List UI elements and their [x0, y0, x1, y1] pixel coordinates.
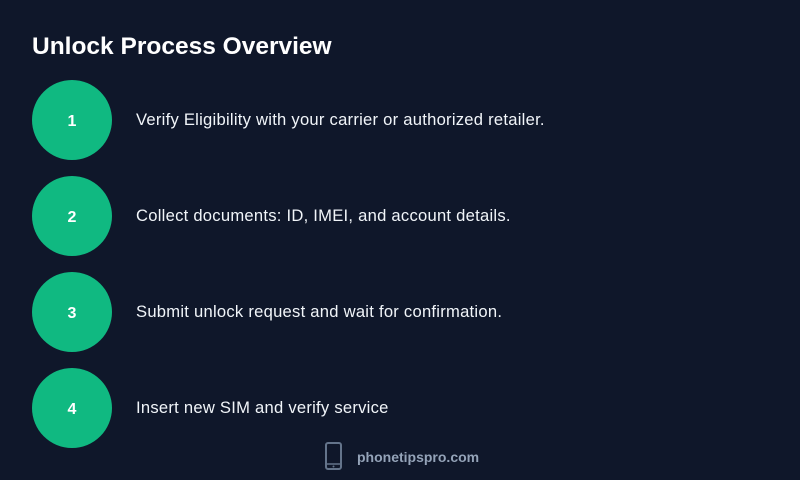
footer — [325, 442, 479, 470]
step 1 circle — [32, 80, 112, 160]
step 2 circle — [32, 176, 112, 256]
step 4 circle — [32, 368, 112, 448]
step 4 — [32, 368, 389, 448]
footer text: phonetipspro.com — [357, 449, 479, 465]
step 1 circle: 1 — [68, 113, 76, 130]
step 2 text: Collect documents: ID, IMEI, and account details. — [136, 206, 511, 225]
icon: phone — [325, 442, 342, 470]
step 2 circle: 2 — [68, 209, 76, 226]
step 1 — [32, 80, 545, 160]
title: Unlock Process Overview — [32, 33, 332, 60]
step 3 text: Submit unlock request and wait for confirmation. — [136, 302, 502, 321]
step 2 — [32, 176, 511, 256]
step 3 circle: 3 — [68, 305, 76, 322]
step 4 circle: 4 — [68, 401, 76, 418]
step 3 — [32, 272, 502, 352]
step 3 circle — [32, 272, 112, 352]
step 1 text: Verify Eligibility with your carrier or authorized retailer. — [136, 110, 545, 129]
step 4 text: Insert new SIM and verify service — [136, 398, 389, 417]
